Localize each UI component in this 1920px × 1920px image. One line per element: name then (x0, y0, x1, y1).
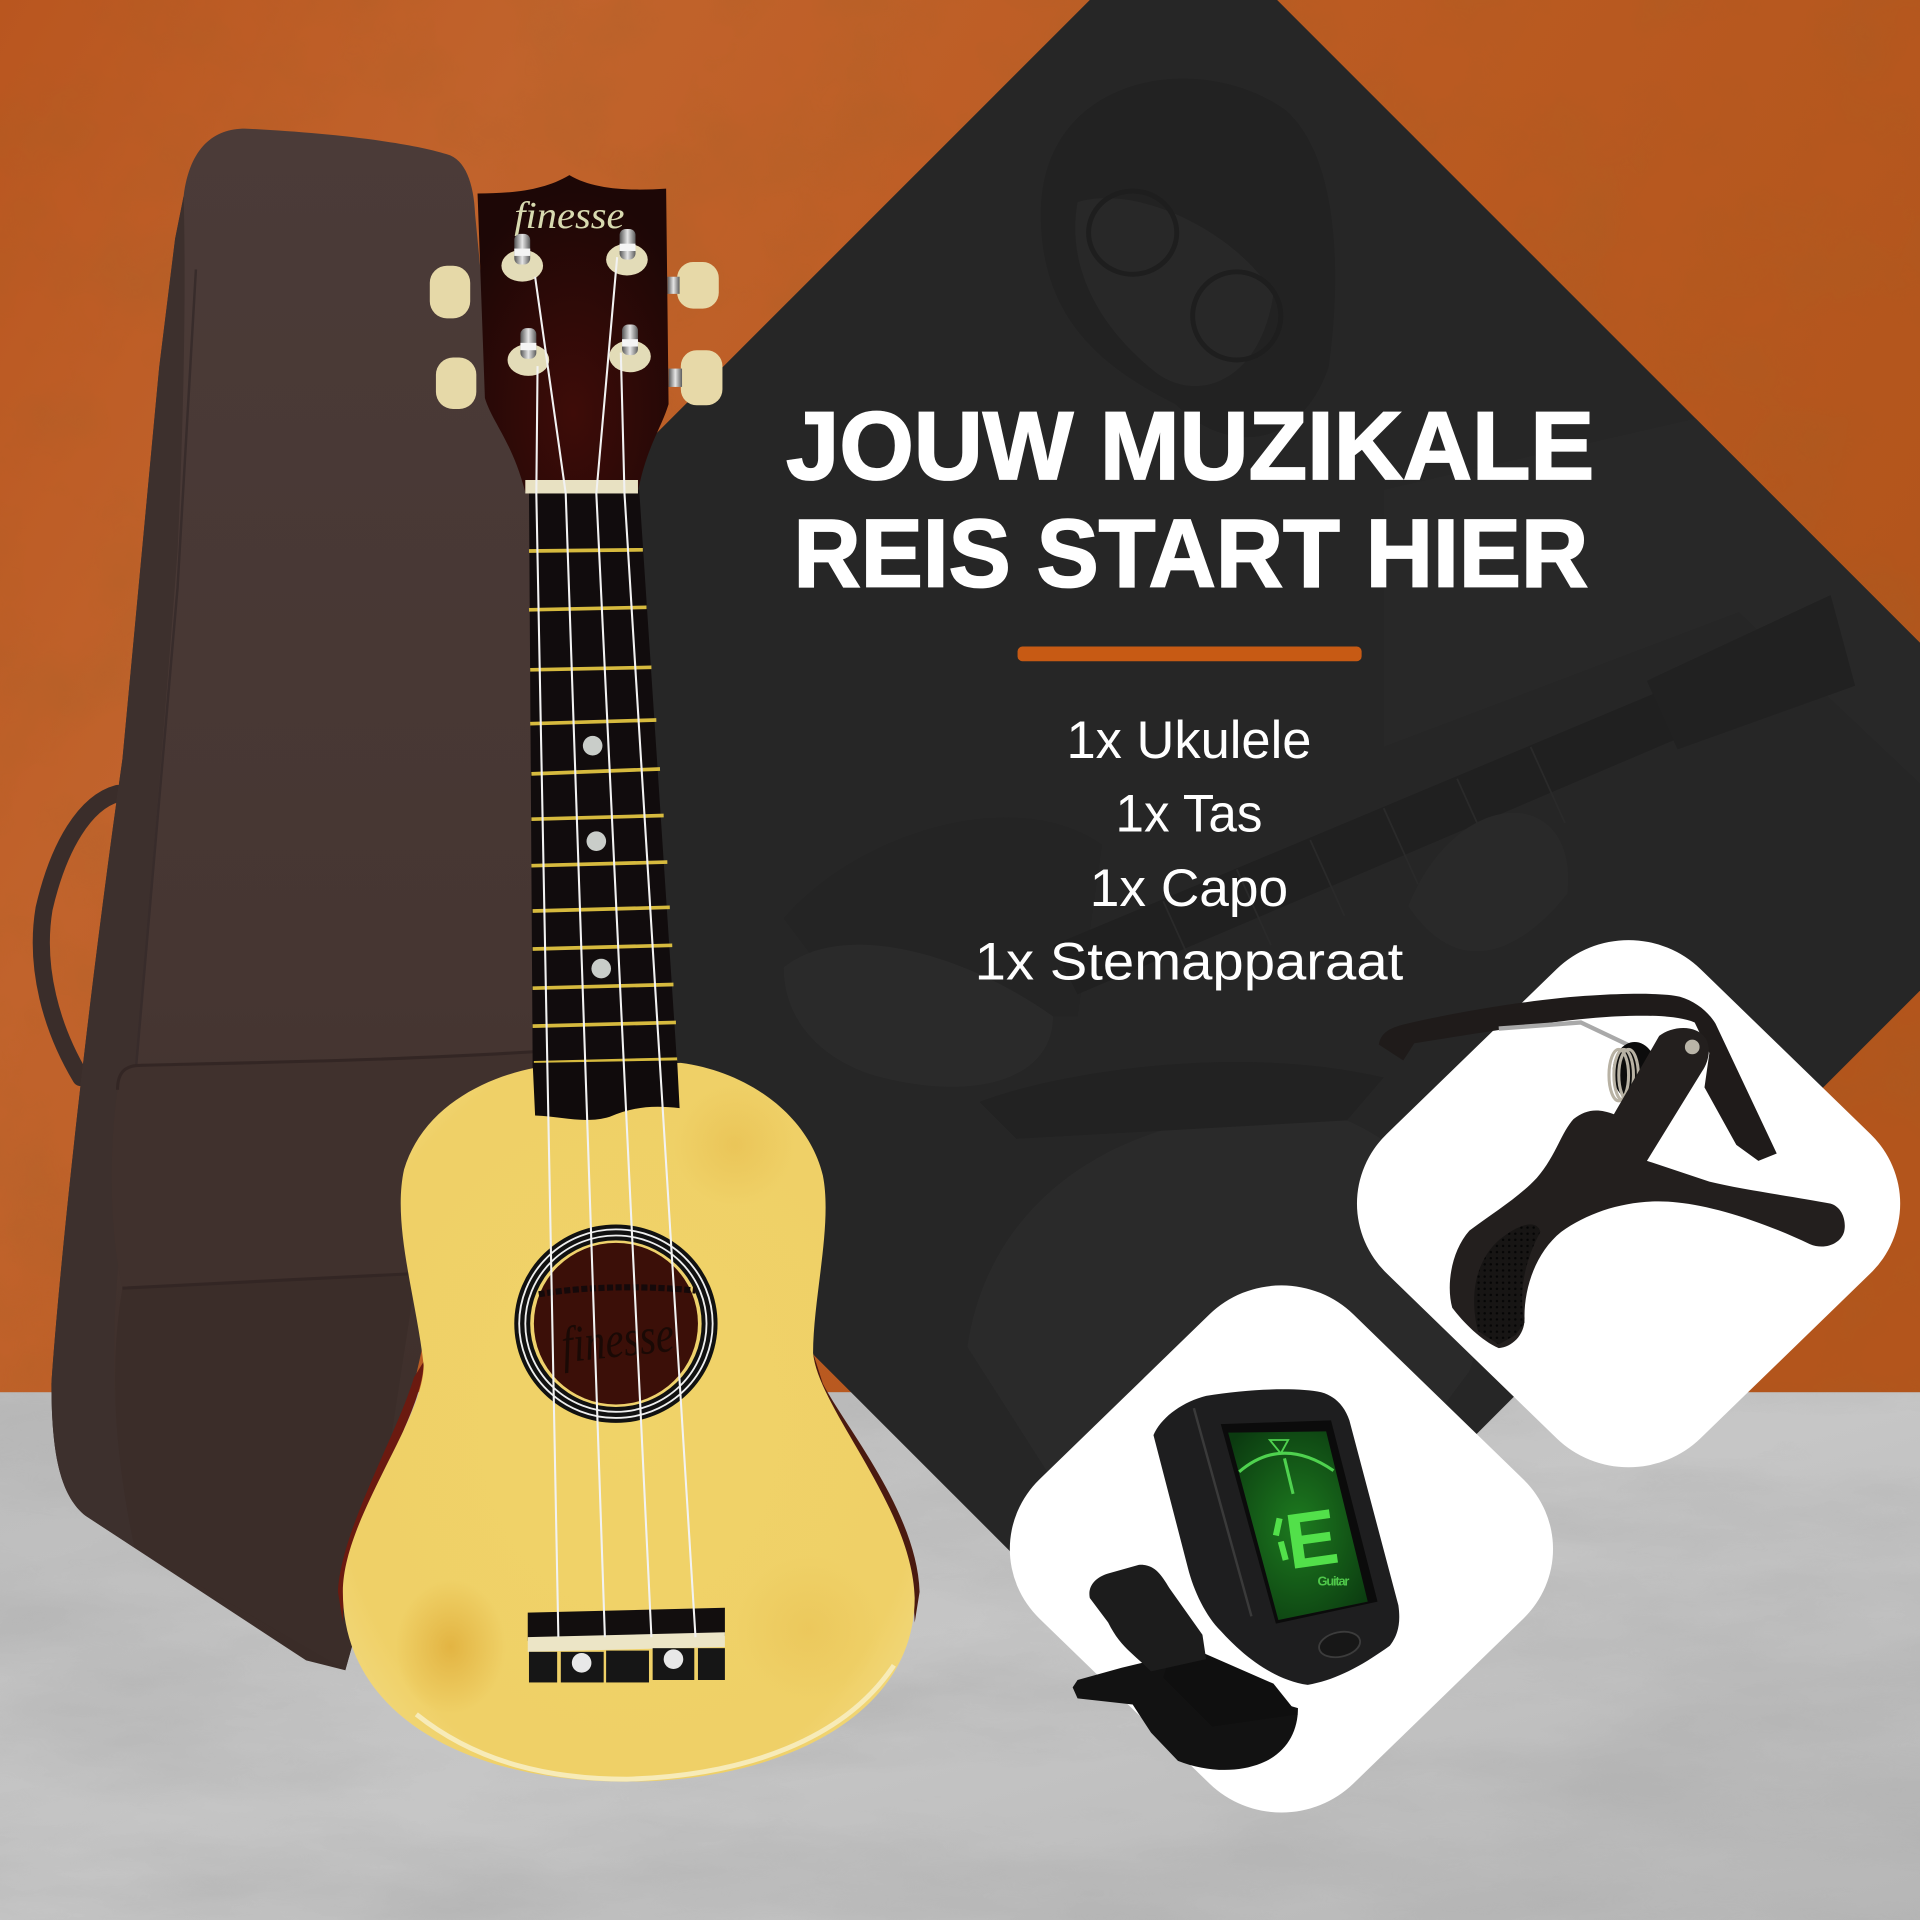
body rim highlight (416, 1665, 894, 1779)
heading (786, 392, 1594, 608)
icon: capo (1379, 994, 1845, 1348)
body side, left (338, 1362, 424, 1622)
frets (529, 550, 677, 1063)
capo screw (1685, 1040, 1700, 1054)
brand wordmark on headstock: finesse (514, 195, 624, 237)
tuner mode label: Guitar (1318, 1574, 1349, 1589)
panel: dark diamond with ghosted player photo (638, 0, 1920, 1552)
tuner screen bezel (1221, 1420, 1378, 1624)
bag: brown gig bag (41, 129, 551, 1670)
soundhole label: finesse (559, 1306, 677, 1374)
tuner scale arc (1239, 1453, 1333, 1472)
soundhole with rosette (514, 1224, 718, 1423)
panel: capo tile (1315, 899, 1920, 1508)
bag handle strap (41, 793, 118, 1078)
background: concrete floor (0, 1392, 1920, 1920)
contents list: 1x Capo (1090, 859, 1288, 918)
tuner needle (1284, 1458, 1293, 1494)
background: orange wall (0, 0, 1920, 1396)
contents list: 1x Stemapparaat (975, 933, 1404, 992)
capo upper arm (1379, 994, 1777, 1161)
headstock (478, 175, 669, 492)
nut (525, 480, 638, 493)
capo lever and grip (1450, 1028, 1845, 1348)
heading: JOUW MUZIKALE (786, 392, 1594, 500)
tuner clip lower jaw (1073, 1659, 1298, 1770)
strings (535, 257, 696, 1637)
bag front pocket (112, 1051, 551, 1288)
heading: REIS START HIER (793, 500, 1588, 608)
tuning knobs (430, 262, 722, 409)
body top (343, 1063, 915, 1782)
tuner note letter: E (1280, 1492, 1343, 1586)
tuner housing (1153, 1389, 1399, 1685)
wood stains (396, 1084, 882, 1714)
contents list (975, 711, 1404, 992)
icon: clip-on tuner (1073, 1389, 1399, 1770)
ukulele (338, 175, 920, 1782)
bridge (528, 1608, 725, 1682)
contents list: 1x Ukulele (1067, 711, 1311, 770)
fingerboard end over body (533, 1060, 680, 1120)
contents list: 1x Tas (1116, 784, 1262, 843)
tuner segment bars (1276, 1518, 1286, 1560)
bag inner piping (122, 269, 196, 1224)
accent rule (1018, 647, 1362, 661)
tuner indicator triangle (1270, 1440, 1288, 1453)
body side, right (813, 1353, 920, 1622)
spring wire (1499, 1022, 1651, 1056)
bag outline (51, 129, 551, 1670)
capo grip texture (1474, 1224, 1540, 1344)
tuner clip thumb tab (1089, 1565, 1206, 1671)
tuning pegs (501, 229, 651, 376)
bag side panel (51, 196, 185, 1548)
fretboard (529, 490, 680, 1120)
tuner screen (1228, 1431, 1368, 1620)
panel: tuner tile (968, 1245, 1595, 1853)
position dots (583, 736, 611, 978)
spring coil (1609, 1042, 1657, 1101)
tuner power button (1317, 1628, 1362, 1661)
tuner clip neck (1163, 1641, 1298, 1727)
